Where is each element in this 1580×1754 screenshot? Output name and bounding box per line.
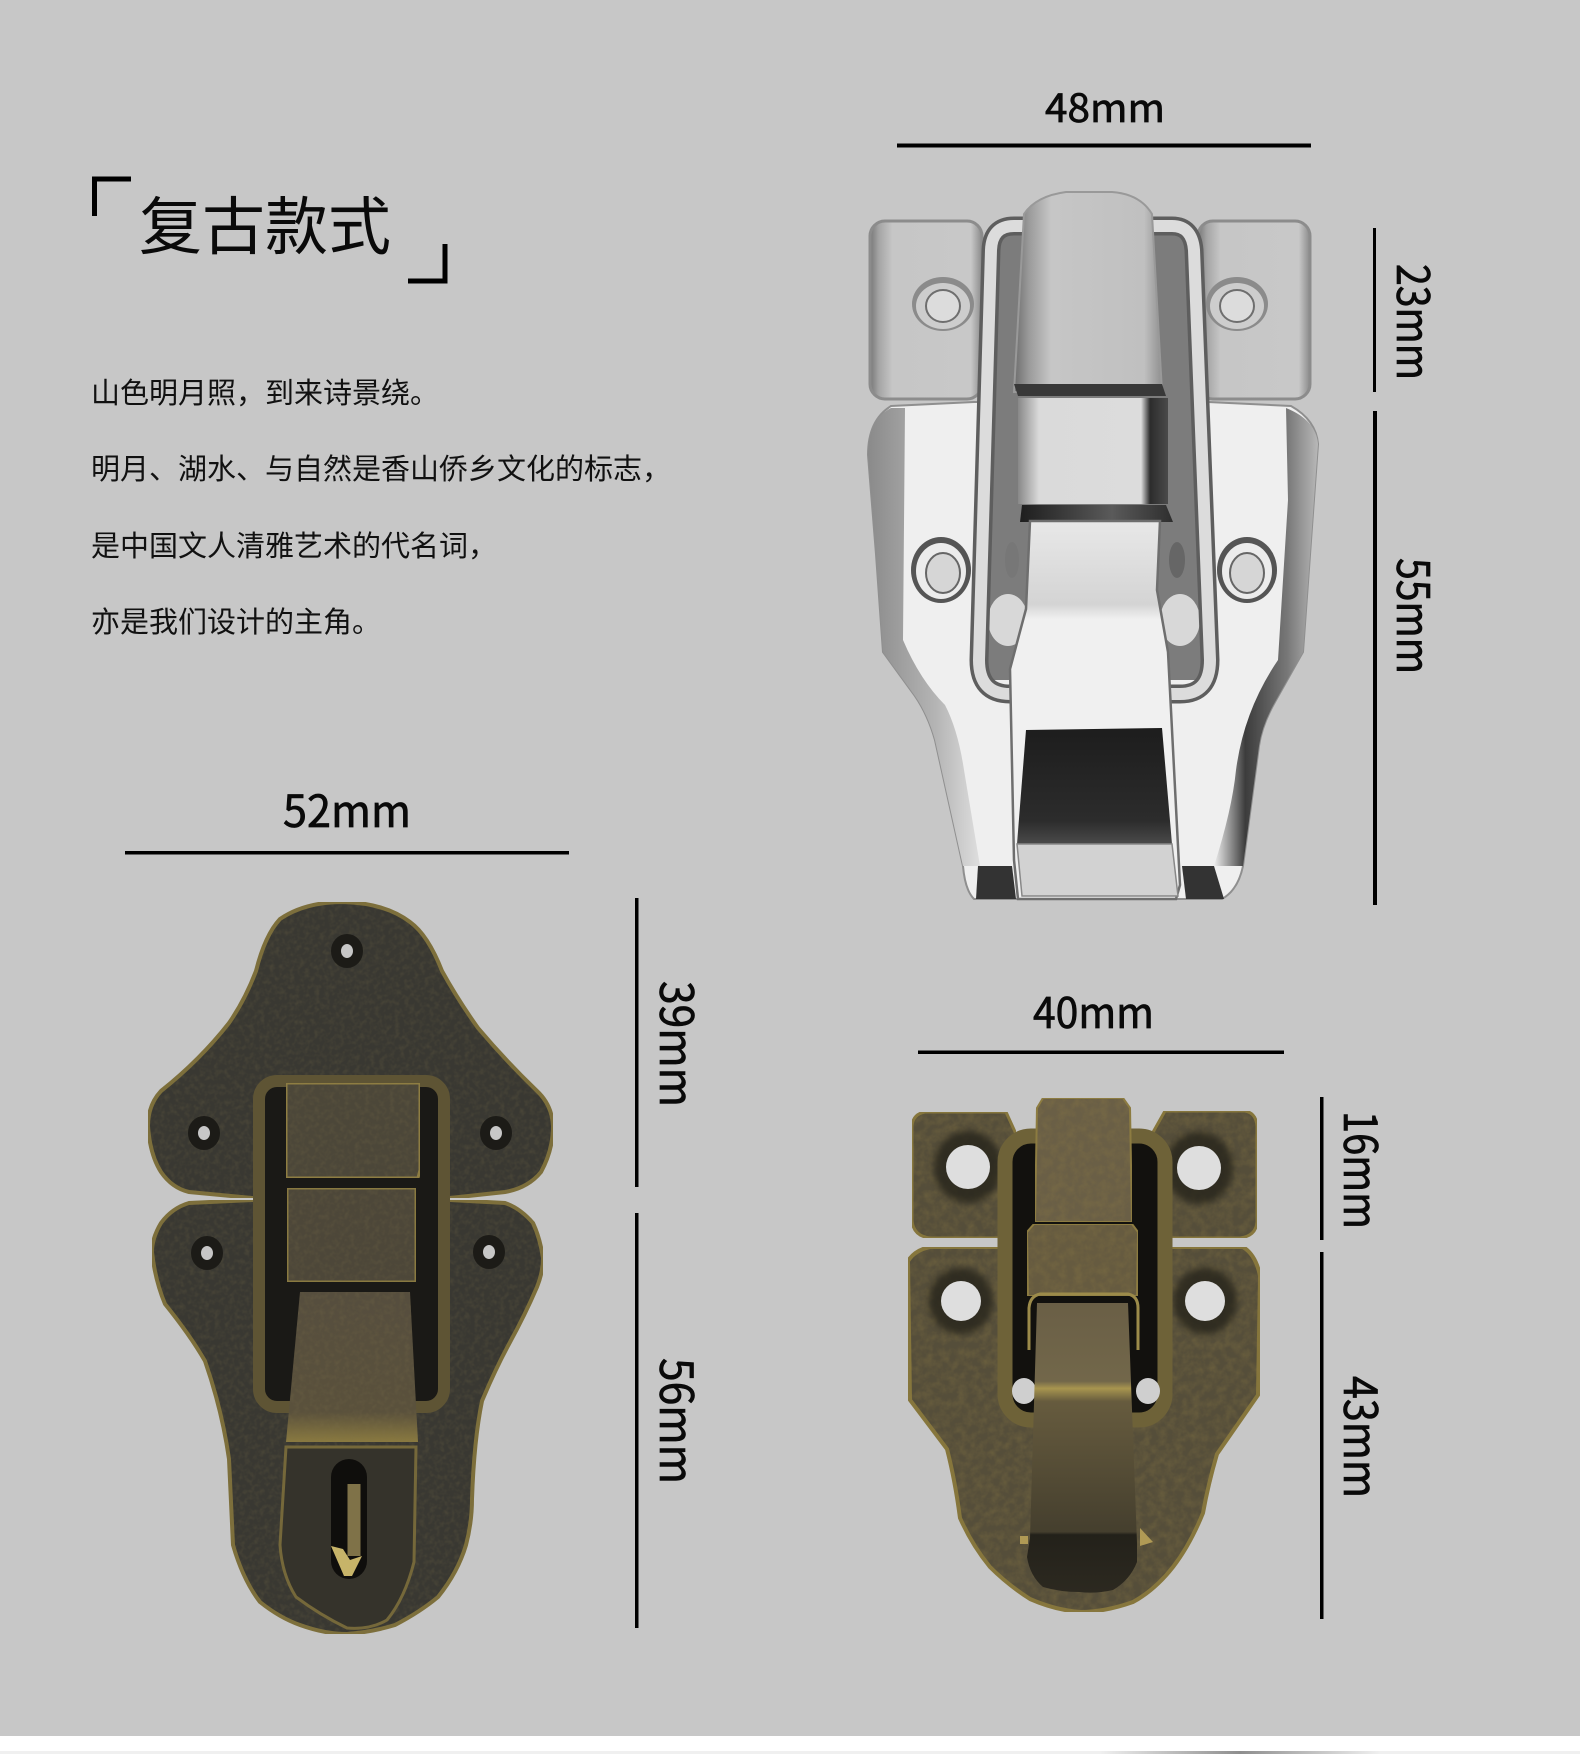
- bottom corners: [976, 866, 1016, 899]
- hook tongue: [280, 1447, 416, 1628]
- dimension: 23mm height: [1373, 228, 1449, 392]
- title bracket: top left: [94, 179, 131, 216]
- dimension: 48mm width: 48mm: [1045, 78, 1165, 134]
- frame loop: [1005, 1136, 1165, 1420]
- dimension: 40mm width: 40mm: [1033, 980, 1154, 1041]
- top right plate: [1198, 221, 1310, 399]
- upper flap shadow bar: [1014, 384, 1166, 396]
- description text block: 亦是我们设计的主角。: [91, 599, 381, 641]
- top left plate: [912, 1112, 1016, 1238]
- middle block: [1027, 1224, 1138, 1296]
- upper flap: [286, 1083, 420, 1178]
- mounting holes: [193, 939, 507, 1265]
- left shaded edge of base: [868, 408, 980, 866]
- inner recess behind wire frame: [984, 228, 1208, 680]
- dimension: 39mm height: [635, 898, 712, 1187]
- hinge bar: [1020, 505, 1173, 522]
- dimension: 56mm height: 56mm: [646, 1358, 712, 1484]
- upper flap: [1035, 1098, 1132, 1222]
- bronze latch illustration: [908, 1098, 1260, 1612]
- hook lever: [1010, 521, 1180, 899]
- title bracket: bottom right: [408, 244, 445, 281]
- key loop tip: [331, 1546, 362, 1576]
- recess openings: [988, 594, 1028, 646]
- antique bronze latch with dimensions: [908, 980, 1396, 1619]
- dimension: 23mm height: 23mm: [1384, 264, 1449, 380]
- hook dark window: [1017, 728, 1172, 844]
- dimension: 56mm height: [635, 1213, 712, 1628]
- dimension: 43mm height: [1320, 1252, 1396, 1619]
- hook slot: [331, 1459, 367, 1579]
- hook brackets: [1029, 1294, 1138, 1350]
- chrome latch with dimensions: [868, 78, 1449, 905]
- right shiny edge of base: [1214, 408, 1318, 866]
- title with corner brackets: [94, 177, 445, 281]
- mounting holes: [911, 277, 1277, 603]
- base plate: [908, 1247, 1260, 1612]
- upper plate: [148, 902, 553, 1198]
- hook lower face: [1017, 844, 1178, 896]
- dimension: 40mm width: [918, 980, 1284, 1054]
- dimension: 39mm height: 39mm: [646, 981, 712, 1107]
- frame openings: [1012, 1378, 1036, 1404]
- dimension: 43mm height: 43mm: [1330, 1376, 1396, 1498]
- key loop: [348, 1484, 360, 1556]
- hinge pins: [1169, 542, 1185, 578]
- lower plate: [152, 1200, 543, 1634]
- heading: 复古款式: [139, 177, 391, 268]
- dimension: 16mm height: 16mm: [1330, 1111, 1396, 1229]
- middle block: [287, 1188, 416, 1282]
- middle block: [1018, 398, 1168, 504]
- bronze latch illustration: [148, 902, 553, 1634]
- base plate: [868, 402, 1318, 899]
- dimension: 52mm width: 52mm: [283, 776, 411, 840]
- dimension: 55mm height: [1373, 411, 1449, 905]
- wire frame: [979, 226, 1210, 694]
- hook lever: [1027, 1303, 1137, 1593]
- chrome latch illustration: [868, 192, 1318, 899]
- dimension: 52mm width: [125, 776, 569, 854]
- hook arm: [286, 1292, 418, 1442]
- mounting holes: [941, 1145, 1225, 1321]
- dimension: 55mm height: 55mm: [1384, 558, 1449, 674]
- description text block: [91, 370, 671, 641]
- top left plate: [870, 221, 982, 399]
- description text block: 山色明月照，到来诗景绕。: [91, 370, 439, 412]
- frame loop: [259, 1081, 444, 1407]
- gold highlights beside hook tip: [1020, 1528, 1153, 1546]
- upper flap: [1014, 192, 1162, 392]
- dimension: 48mm width: [897, 78, 1311, 148]
- description text block: 明月、湖水、与自然是香山侨乡文化的标志，: [91, 446, 671, 488]
- top right plate: [1152, 1111, 1257, 1238]
- antique black bronze latch with dimensions: [125, 776, 712, 1634]
- description text block: 是中国文人清雅艺术的代名词，: [91, 523, 497, 565]
- hole shadows: [929, 1131, 1237, 1334]
